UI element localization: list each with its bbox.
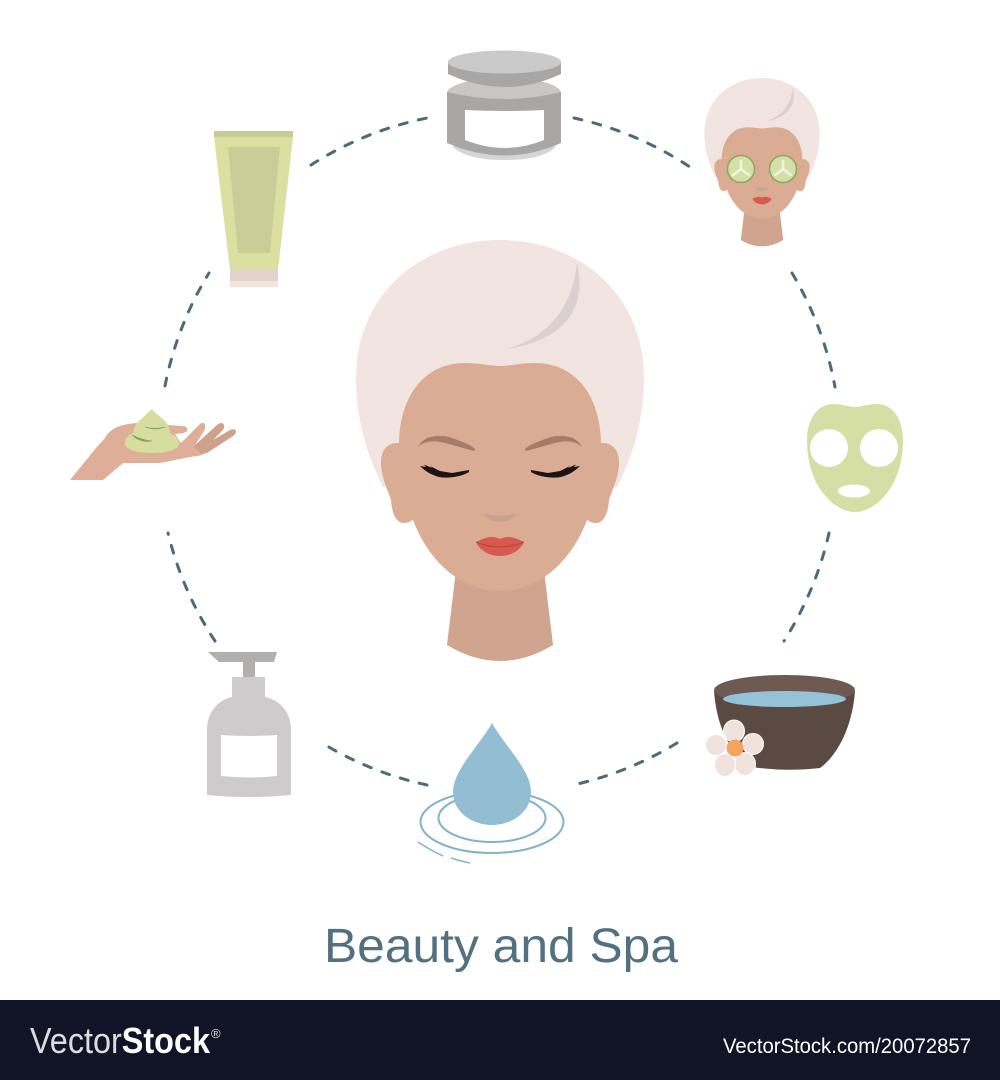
registered mark: ® bbox=[211, 1026, 221, 1041]
icon: water drop with ripples bbox=[418, 723, 564, 863]
dashed circle connecting the icons bbox=[165, 118, 835, 785]
neck bbox=[447, 570, 553, 661]
icon: face with cucumber slices bbox=[704, 78, 820, 246]
image id: VectorStock.com/20072857 bbox=[723, 1035, 971, 1058]
bottle label bbox=[221, 735, 277, 778]
footer bar bbox=[0, 1000, 1000, 1080]
nose bbox=[483, 513, 517, 522]
back fingers bbox=[190, 423, 236, 457]
tube label bbox=[228, 147, 280, 253]
icon: green face mask bbox=[807, 404, 903, 512]
VectorStock logo: VectorStock bbox=[30, 1020, 211, 1061]
icon: hand holding cream bbox=[70, 409, 236, 480]
ears bbox=[381, 443, 619, 523]
jar label bbox=[465, 110, 544, 148]
face bbox=[399, 363, 601, 591]
central woman's head with closed eyes bbox=[356, 240, 644, 661]
closed eyes with lashes bbox=[420, 464, 580, 478]
icon: pump bottle bbox=[207, 652, 291, 797]
tube cap bbox=[230, 270, 278, 281]
towel fold bbox=[507, 263, 579, 349]
lips bbox=[476, 537, 524, 556]
hand bbox=[70, 423, 205, 480]
icon: spa bowl with flower bbox=[706, 675, 855, 776]
eyebrows bbox=[418, 436, 582, 451]
hair towel bbox=[356, 240, 644, 487]
cucumber slices bbox=[728, 156, 796, 182]
water bbox=[723, 691, 846, 707]
icon: cream jar bbox=[447, 50, 561, 160]
cream dollop bbox=[125, 409, 179, 453]
title: Beauty and Spa bbox=[324, 920, 678, 973]
icon: green cream tube bbox=[214, 131, 293, 287]
flower bbox=[706, 720, 764, 776]
